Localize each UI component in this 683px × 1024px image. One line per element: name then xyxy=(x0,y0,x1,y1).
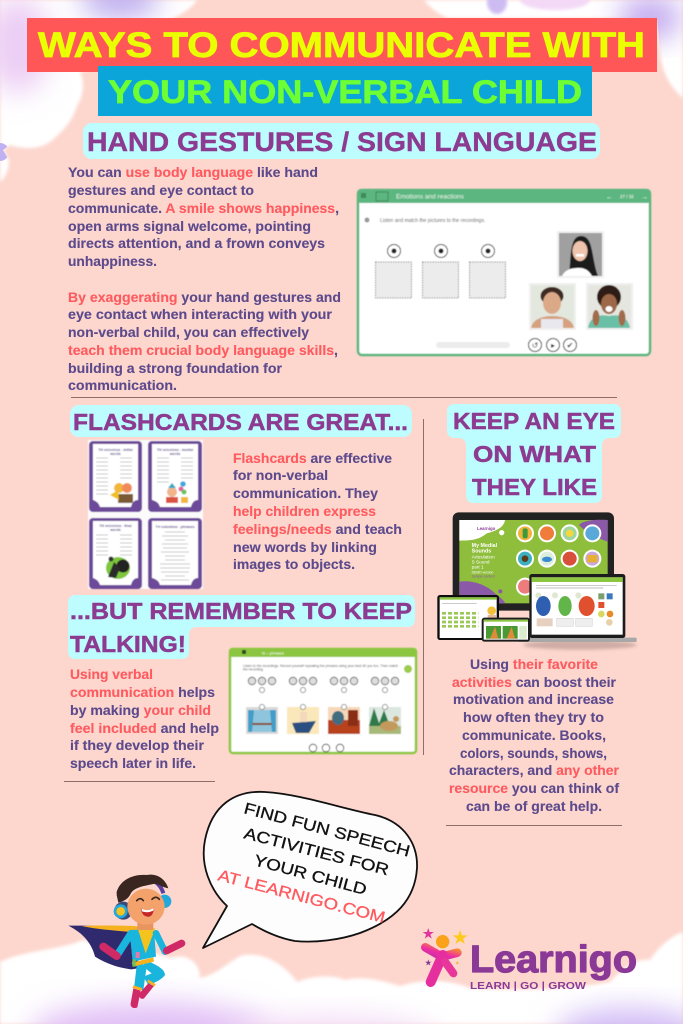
monitor: part 1 xyxy=(472,565,484,570)
audio button rows xyxy=(248,677,399,685)
picture: ship xyxy=(287,707,319,734)
drop boxes xyxy=(376,262,506,298)
text block: verbal communication: if they develop their xyxy=(70,738,205,753)
panel: emotions and reactions activity: Emotions and reactions xyxy=(396,194,465,200)
cape xyxy=(68,926,137,969)
flashcard: final words: words xyxy=(109,528,121,532)
logo icon: ★ xyxy=(424,957,432,967)
text block: flashcards: Flashcards are effective xyxy=(233,451,392,466)
speech bubble: FIND FUN SPEECH xyxy=(242,800,412,861)
text block: body language: non-verbal child, you can effectively xyxy=(68,325,309,340)
arms xyxy=(118,934,131,953)
flashcard: initial words: words xyxy=(109,452,121,456)
text block: body language xyxy=(68,165,341,393)
monitor: S Sound xyxy=(472,560,490,565)
text block: body language: unhappiness. xyxy=(68,254,157,269)
text block: body language: directs attention, and a frown conveys xyxy=(68,236,325,251)
boots xyxy=(131,988,141,1008)
flashcard: final words: TH voiceless - final xyxy=(99,524,132,528)
monitor: DEMO version xyxy=(472,571,493,575)
text block: body language: communicate. A smile shows happiness , xyxy=(68,201,339,216)
divider xyxy=(71,396,617,398)
text block: favorite activities: activities can boost their xyxy=(452,675,617,690)
text block: body language: You can use body language like hand xyxy=(68,165,318,180)
text block: body language: communication. xyxy=(68,378,177,393)
text block: flashcards: communication. They xyxy=(233,486,379,501)
speech bubble: AT LEARNIGO.COM xyxy=(216,867,387,927)
control buttons xyxy=(309,744,344,752)
text block: verbal communication: Using verbal xyxy=(70,667,153,682)
panel: phrases activity: the recording. xyxy=(243,668,264,672)
phone xyxy=(482,618,530,642)
text block: flashcards xyxy=(233,451,402,572)
picture: animal in forest xyxy=(369,707,401,734)
panel: emotions and reactions activity: ✔ xyxy=(567,341,573,350)
panel: emotions and reactions activity: 27 / 32 xyxy=(620,194,634,199)
audio buttons xyxy=(388,244,494,258)
monitor: My Medial xyxy=(472,543,498,549)
photo: woman with eyes closed xyxy=(529,283,576,330)
text block: verbal communication: by making your child xyxy=(70,703,211,718)
logo icon: ★ xyxy=(451,928,469,949)
monitor: Sample content xyxy=(472,575,495,579)
logo icon xyxy=(422,927,469,982)
panel: phrases activity xyxy=(229,648,417,753)
text block: flashcards: feelings/needs and teach xyxy=(233,522,402,537)
control buttons xyxy=(528,338,576,352)
title line 2: YOUR NON-VERBAL CHILD xyxy=(108,74,582,110)
text block: favorite activities: characters, and any other xyxy=(449,763,620,778)
flashcard: medial words: TH voiceless - medial xyxy=(157,448,193,452)
text block: flashcards: help children express xyxy=(233,504,376,519)
cloud: top left xyxy=(0,0,197,182)
picture: bird on chimney xyxy=(328,707,360,734)
cloud: bottom xyxy=(0,932,683,1024)
title line 1: WAYS TO COMMUNICATE WITH xyxy=(38,26,645,65)
text block: favorite activities: resource you can think of xyxy=(449,781,620,796)
text block: flashcards: images to objects. xyxy=(233,557,355,572)
text block: flashcards: new words by linking xyxy=(233,540,377,555)
title line 1 xyxy=(27,18,657,72)
speech bubble: YOUR CHILD xyxy=(252,852,368,899)
monitor: Sounds xyxy=(472,549,491,555)
flashcard: initial words: TH voiceless - initial xyxy=(98,448,133,452)
panel: emotions and reactions activity: ← xyxy=(606,194,613,201)
text block: favorite activities: how often they try to xyxy=(463,710,604,725)
cloud: top right xyxy=(424,0,683,98)
text block: favorite activities: Using their favorite xyxy=(470,657,599,672)
monitor: Articulation xyxy=(472,555,495,560)
panel: emotions and reactions activity: Listen and match the pictures to the recordings. xyxy=(380,218,485,224)
text block: favorite activities: can be of great help. xyxy=(466,799,602,814)
character: superhero kid xyxy=(68,875,182,1008)
monitor xyxy=(453,512,614,611)
logo: Learnigo: Learnigo xyxy=(470,939,637,981)
panel: emotions and reactions activity: ↺ xyxy=(532,341,539,350)
panel: emotions and reactions activity xyxy=(357,189,651,355)
text block: verbal communication: feel included and help xyxy=(70,721,219,736)
heading: keep an eye xyxy=(447,404,621,503)
tablet xyxy=(437,595,499,640)
flashcard: final words xyxy=(89,518,142,589)
heading: keep an eye: KEEP AN EYE xyxy=(453,408,615,434)
text block: verbal communication xyxy=(70,667,219,771)
panel: phrases activity: Listen to the recordings. Record yourself repeating the phrases using your best /θ/ you too. Then match xyxy=(243,664,398,668)
legs xyxy=(134,960,147,990)
monitor: Learnigo xyxy=(477,526,496,531)
flashcard: initial words xyxy=(89,441,142,512)
speech bubble xyxy=(203,792,417,948)
heading: keep talking: ...BUT REMEMBER TO KEEP xyxy=(70,598,412,624)
text block: verbal communication: communication helps xyxy=(70,685,215,700)
photo: smiling woman xyxy=(557,231,604,278)
flashcards image xyxy=(88,440,203,589)
logo: Learnigo: LEARN | GO | GROW xyxy=(470,980,586,992)
text block: body language: gestures and eye contact to xyxy=(68,183,254,198)
text block: verbal communication: speech later in life. xyxy=(70,756,196,771)
picture: window xyxy=(246,707,278,734)
text block: favorite activities xyxy=(449,657,620,814)
logo icon: ★ xyxy=(455,961,460,966)
logo: Learnigo xyxy=(422,927,637,992)
text block: favorite activities: motivation and increase xyxy=(453,692,615,707)
panel: emotions and reactions activity: ▸ xyxy=(551,341,555,350)
heading: hand gestures: HAND GESTURES / SIGN LANGUAGE xyxy=(87,127,597,157)
heading: keep talking: TALKING! xyxy=(70,631,186,657)
text block: favorite activities: colors, sounds, shows, xyxy=(460,746,607,761)
flashcard: medial words: words xyxy=(169,452,180,456)
panel: emotions and reactions activity: → xyxy=(641,194,648,201)
torso xyxy=(129,929,156,962)
text block: body language: eye contact when interacting with your xyxy=(68,307,333,322)
text block: body language: building a strong foundation for xyxy=(68,361,283,376)
heading: keep an eye: ON WHAT xyxy=(473,441,596,467)
flashcard: phrases xyxy=(148,518,202,589)
photo: surprised man xyxy=(586,283,633,330)
flashcard: phrases: TH voiceless - phrases xyxy=(156,525,194,529)
title line 2 xyxy=(98,66,592,116)
text block: body language: teach them crucial body language skills , xyxy=(68,343,338,358)
text block: body language: By exaggerating your hand gestures and xyxy=(68,290,341,305)
text block: flashcards: for non-verbal xyxy=(233,468,328,483)
text block: favorite activities: communicate. Books, xyxy=(462,728,606,743)
speech bubble: ACTIVITIES FOR xyxy=(242,825,391,879)
panel: phrases activity: th – phrases xyxy=(262,650,284,656)
heading: flashcards are great: FLASHCARDS ARE GREAT... xyxy=(73,409,408,435)
laptop xyxy=(518,574,637,642)
logo icon: ★ xyxy=(422,927,435,943)
heading: keep an eye: THEY LIKE xyxy=(472,474,597,500)
head xyxy=(137,922,153,930)
heading: keep talking xyxy=(68,595,415,659)
devices mockup xyxy=(437,512,637,650)
flashcard: medial words xyxy=(148,441,202,512)
text block: body language: open arms signal welcome, pointing xyxy=(68,219,311,234)
